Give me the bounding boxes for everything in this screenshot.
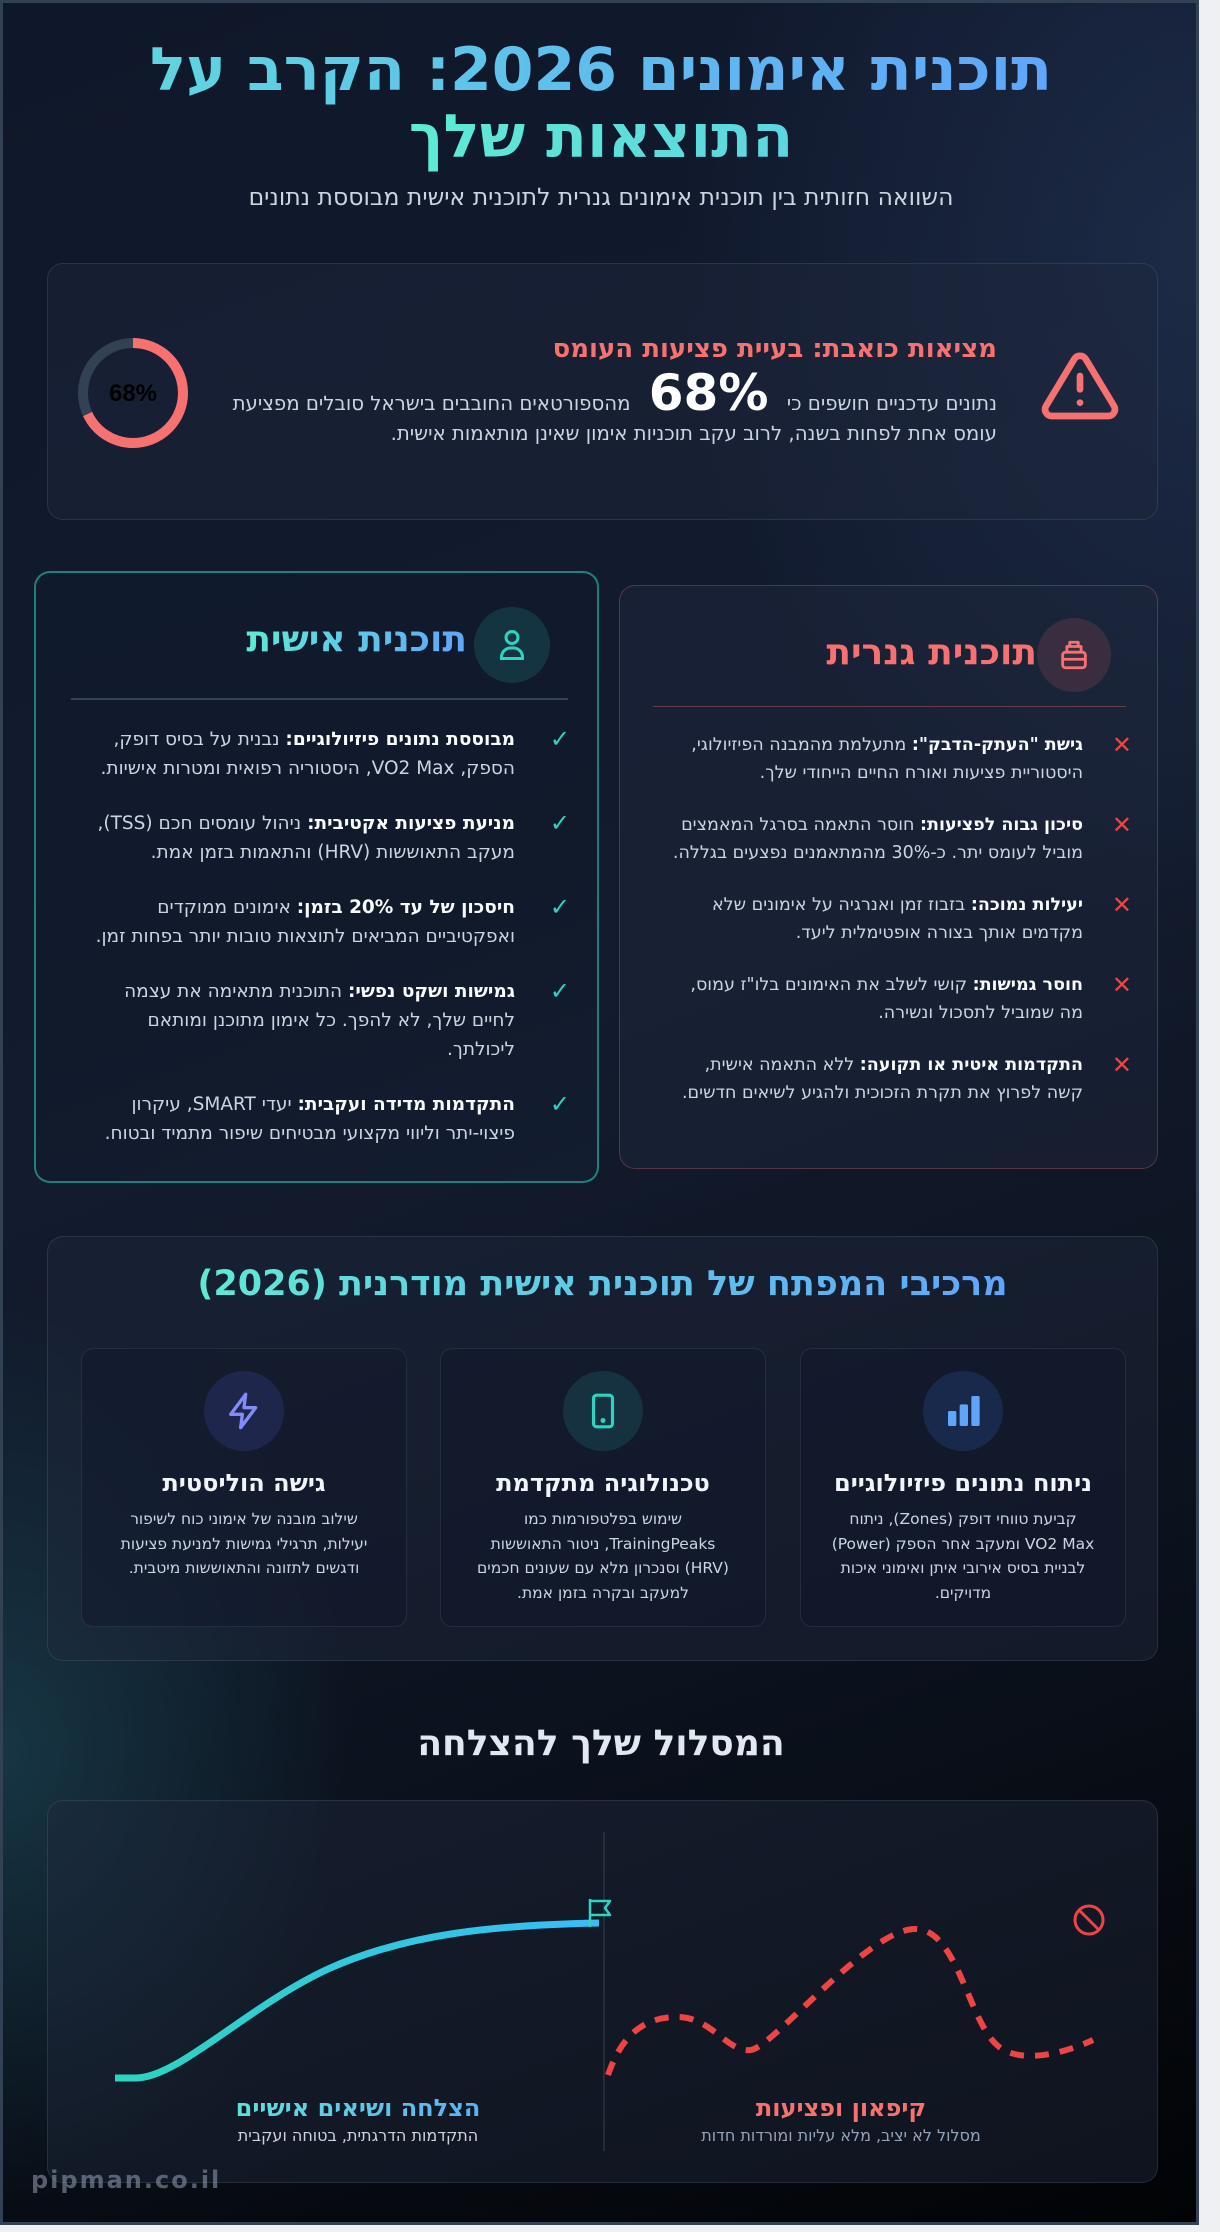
item: flexibility: ✓ bbox=[550, 977, 570, 1005]
panel: personal plan bbox=[34, 571, 599, 1183]
icon: bar chart bbox=[923, 1371, 1003, 1451]
personal items list bbox=[96, 725, 570, 1144]
generic title: תוכנית גנרית bbox=[826, 632, 1037, 673]
icon: user bbox=[474, 607, 550, 683]
generic items list bbox=[673, 731, 1132, 1102]
component: physiological data: ניתוח נתונים פיזיולוגיים bbox=[834, 1469, 1092, 1497]
item: data based: מבוססת נתונים פיזיולוגיים: נבנית על בסיס דופק, הספק, VO2 Max, היסטוריה רפואית ומטרות אישיות. bbox=[101, 729, 515, 779]
item: slow progress: התקדמות איטית או תקועה: ללא התאמה אישית, bbox=[705, 1055, 1083, 1075]
generic header bbox=[826, 618, 1111, 692]
alert text: עומס אחת לפחות בשנה, לרוב עקב תוכניות אימון שאינן מותאמות אישית. bbox=[391, 422, 997, 445]
alert text: נתונים עדכניים חושפים כי 68% מהספורטאים החובבים בישראל סובלים מפציעת bbox=[233, 364, 997, 422]
item: low efficiency: יעילות נמוכה: בזבוז זמן ואנרגיה על אימונים שלא מקדמים אותך בצורה אופטימלית ליעד. bbox=[712, 895, 1083, 942]
label: stagnation bbox=[701, 2094, 981, 2145]
component: physiological data bbox=[800, 1348, 1126, 1627]
item: measurable progress: ✓ bbox=[550, 1090, 570, 1118]
icon: lightning bbox=[204, 1371, 284, 1451]
item: injury prevention: ✓ bbox=[550, 809, 570, 837]
item: injury risk: ✕ bbox=[1112, 811, 1132, 839]
component: physiological data: קביעת טווחי דופק (Zones), ניתוח VO2 Max ומעקב אחר הספק (Power) לבניית בסיס אירובי איתן ואימוני איכות מדויקים. bbox=[832, 1510, 1094, 1602]
title bbox=[150, 35, 1052, 172]
item: data based: ✓ bbox=[550, 725, 570, 753]
chart: success vs stagnation paths bbox=[115, 1832, 1104, 2151]
item: slow progress: ✕ bbox=[1112, 1051, 1132, 1079]
alert heading: מציאות כואבת: בעיית פציעות העומס bbox=[553, 334, 997, 364]
component: advanced technology: שימוש בפלטפורמות כמו TrainingPeaks, ניטור התאוששות (HRV) וסנכרון מלא עם שעונים חכמים למעקב ובקרה בזמן אמת. bbox=[477, 1510, 729, 1602]
item: no flexibility bbox=[690, 971, 1132, 1022]
label: success bbox=[236, 2094, 480, 2145]
components heading: מרכיבי המפתח של תוכנית אישית מודרנית (2026) bbox=[197, 1264, 1008, 1304]
personal title: תוכנית אישית bbox=[246, 619, 467, 660]
panel: path chart bbox=[47, 1800, 1158, 2183]
personal header bbox=[246, 607, 550, 683]
panel: key components bbox=[47, 1236, 1158, 1661]
component: holistic: שילוב מובנה של אימוני כוח לשיפור יעילות, תרגילי גמישות למניעת פציעות ודגשים לתזונה והתאוששות מיטבית. bbox=[121, 1510, 367, 1577]
label: success: התקדמות הדרגתית, בטוחה ועקבית bbox=[238, 2126, 478, 2145]
icon: generic box bbox=[1037, 618, 1111, 692]
item: copy paste: גישת "העתק-הדבק": מתעלמת מהמבנה הפיזיולוגי, היסטוריית פציעות ואורח החיים הייחודי שלך. bbox=[691, 735, 1083, 782]
component: advanced technology bbox=[440, 1348, 766, 1627]
path heading: המסלול שלך להצלחה bbox=[417, 1723, 785, 1764]
component: advanced technology: טכנולוגיה מתקדמת bbox=[496, 1469, 710, 1497]
component: holistic bbox=[81, 1348, 407, 1627]
title: תוכנית אימונים 2026: הקרב על bbox=[150, 35, 1052, 105]
item: copy paste: ✕ bbox=[1112, 731, 1132, 759]
item: low efficiency: ✕ bbox=[1112, 891, 1132, 919]
item: slow progress: קשה לפרוץ את תקרת הזכוכית ולהגיע לשיאים חדשים. bbox=[682, 1082, 1083, 1102]
label: stagnation: קיפאון ופציעות bbox=[756, 2094, 926, 2122]
panel: generic plan bbox=[619, 585, 1158, 1169]
watermark: pipman.co.il bbox=[31, 2166, 221, 2194]
item: measurable progress: התקדמות מדידה ועקבית: יעדי SMART, עיקרון פיצוי-יתר וליווי מקצועי מבטיחים שיפור מתמיד ובטוח. bbox=[105, 1094, 515, 1144]
label: success: הצלחה ושיאים אישיים bbox=[236, 2094, 480, 2122]
item: flexibility: גמישות ושקט נפשי: התוכנית מתאימה את עצמה לחיים שלך, לא להפך. כל אימון מתוכנן ומותאם ליכולתך. bbox=[124, 981, 515, 1060]
chart: ring 68%: 68% bbox=[109, 380, 157, 407]
item: injury risk: סיכון גבוה לפציעות: חוסר התאמה בסרגל המאמצים מוביל לעומס יתר. כ-30% מהמתאמנים נפצעים בגללה. bbox=[673, 815, 1083, 862]
item: injury prevention: מניעת פציעות אקטיבית: ניהול עומסים חכם (TSS), מעקב התאוששות (HRV) והתאמות בזמן אמת. bbox=[97, 813, 515, 863]
panel: alert bbox=[47, 263, 1158, 520]
item: time saving: חיסכון של עד 20% בזמן: אימונים ממוקדים ואפקטיביים המביאים לתוצאות טובות יותר בפחות זמן. bbox=[96, 897, 515, 947]
icon: phone bbox=[563, 1371, 643, 1451]
label: stagnation: מסלול לא יציב, מלא עליות ומורדות חדות bbox=[701, 2126, 981, 2145]
item: slow progress bbox=[682, 1051, 1132, 1102]
icon: warning bbox=[1042, 352, 1118, 420]
item: no flexibility: ✕ bbox=[1112, 971, 1132, 999]
item: no flexibility: חוסר גמישות: קושי לשלב את האימונים בלו"ז עמוס, bbox=[690, 975, 1083, 995]
chart: ring 68% bbox=[78, 338, 188, 448]
component: holistic: גישה הוליסטית bbox=[162, 1469, 326, 1497]
title: התוצאות שלך bbox=[409, 102, 793, 172]
subtitle: השוואה חזותית בין תוכנית אימונים גנרית לתוכנית אישית מבוססת נתונים bbox=[249, 183, 953, 211]
item: no flexibility: מה שמוביל לתסכול ונשירה. bbox=[878, 1002, 1083, 1022]
item: time saving: ✓ bbox=[550, 893, 570, 921]
